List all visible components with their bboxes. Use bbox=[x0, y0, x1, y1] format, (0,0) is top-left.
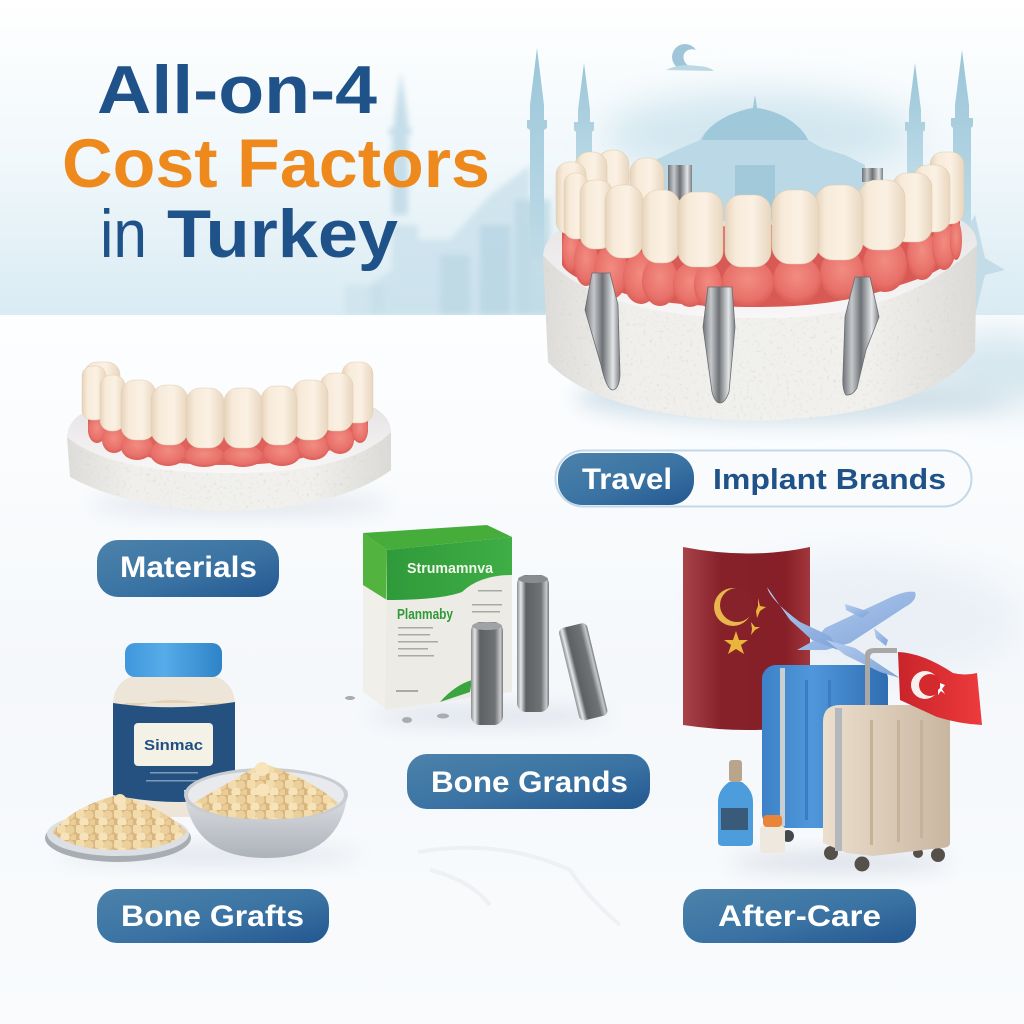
title: Turkey bbox=[167, 196, 398, 272]
pill: Travel / Implant Brands bbox=[556, 450, 972, 506]
beige suitcase bbox=[823, 648, 950, 872]
city silhouette left bbox=[345, 165, 550, 315]
box headline: Strumamnva bbox=[407, 560, 494, 577]
faint watermark shape bbox=[418, 848, 620, 925]
jar label text: Sinmac bbox=[144, 737, 203, 754]
tab: Travel bbox=[558, 453, 694, 505]
label: After-Care: After-Care bbox=[718, 900, 881, 933]
bowl of granules bbox=[184, 762, 348, 858]
upper implant posts bbox=[668, 165, 883, 200]
mosque bbox=[656, 96, 865, 221]
travel group: banner, plane, luggage, flag bbox=[683, 547, 982, 872]
tab: Implant Brands: Implant Brands bbox=[713, 464, 946, 496]
small denture model bbox=[67, 362, 391, 514]
implant screws bbox=[585, 273, 879, 403]
teeth bbox=[82, 362, 373, 448]
title: Cost Factors bbox=[62, 125, 490, 202]
gum bbox=[562, 218, 962, 307]
label: After-Care bbox=[683, 889, 916, 943]
concrete base bbox=[543, 215, 977, 421]
tab: Travel: Travel bbox=[582, 463, 672, 496]
title: in bbox=[100, 196, 147, 272]
gum bbox=[88, 415, 368, 467]
product box bbox=[363, 525, 512, 710]
skyline of Istanbul bbox=[345, 48, 1005, 315]
implant product box and cylinders bbox=[345, 525, 610, 725]
airplane bbox=[767, 587, 916, 678]
plate of granules bbox=[45, 794, 191, 862]
stars bbox=[724, 598, 766, 654]
title: All-on-4 bbox=[97, 52, 377, 128]
stone base bbox=[67, 408, 391, 511]
Turkish flag bbox=[898, 652, 982, 725]
label: Materials: Materials bbox=[120, 551, 257, 584]
dark red banner bbox=[683, 547, 810, 730]
label: Materials bbox=[97, 540, 279, 597]
crescent bbox=[714, 588, 754, 626]
label: Bone Grafts: Bone Grafts bbox=[121, 900, 304, 933]
label: Bone Grafts bbox=[97, 889, 329, 943]
cylinders bbox=[471, 575, 608, 725]
crescent moon and cloud bbox=[666, 44, 714, 71]
title bbox=[62, 52, 490, 272]
small jar bbox=[760, 815, 785, 853]
minarets bbox=[527, 48, 973, 260]
box subtitle: Planmaby bbox=[397, 606, 454, 623]
faded minaret bbox=[388, 72, 412, 215]
label: Bone Grands: Bone Grands bbox=[431, 766, 628, 799]
teeth bbox=[556, 150, 964, 267]
blue bottle bbox=[718, 760, 753, 846]
label: Bone Grands bbox=[407, 754, 650, 809]
jar bbox=[113, 643, 235, 817]
debris bbox=[345, 696, 449, 723]
jar with bone graft granules bbox=[45, 643, 360, 863]
blue suitcase bbox=[762, 665, 888, 842]
large jaw model with implants bbox=[543, 150, 1005, 424]
